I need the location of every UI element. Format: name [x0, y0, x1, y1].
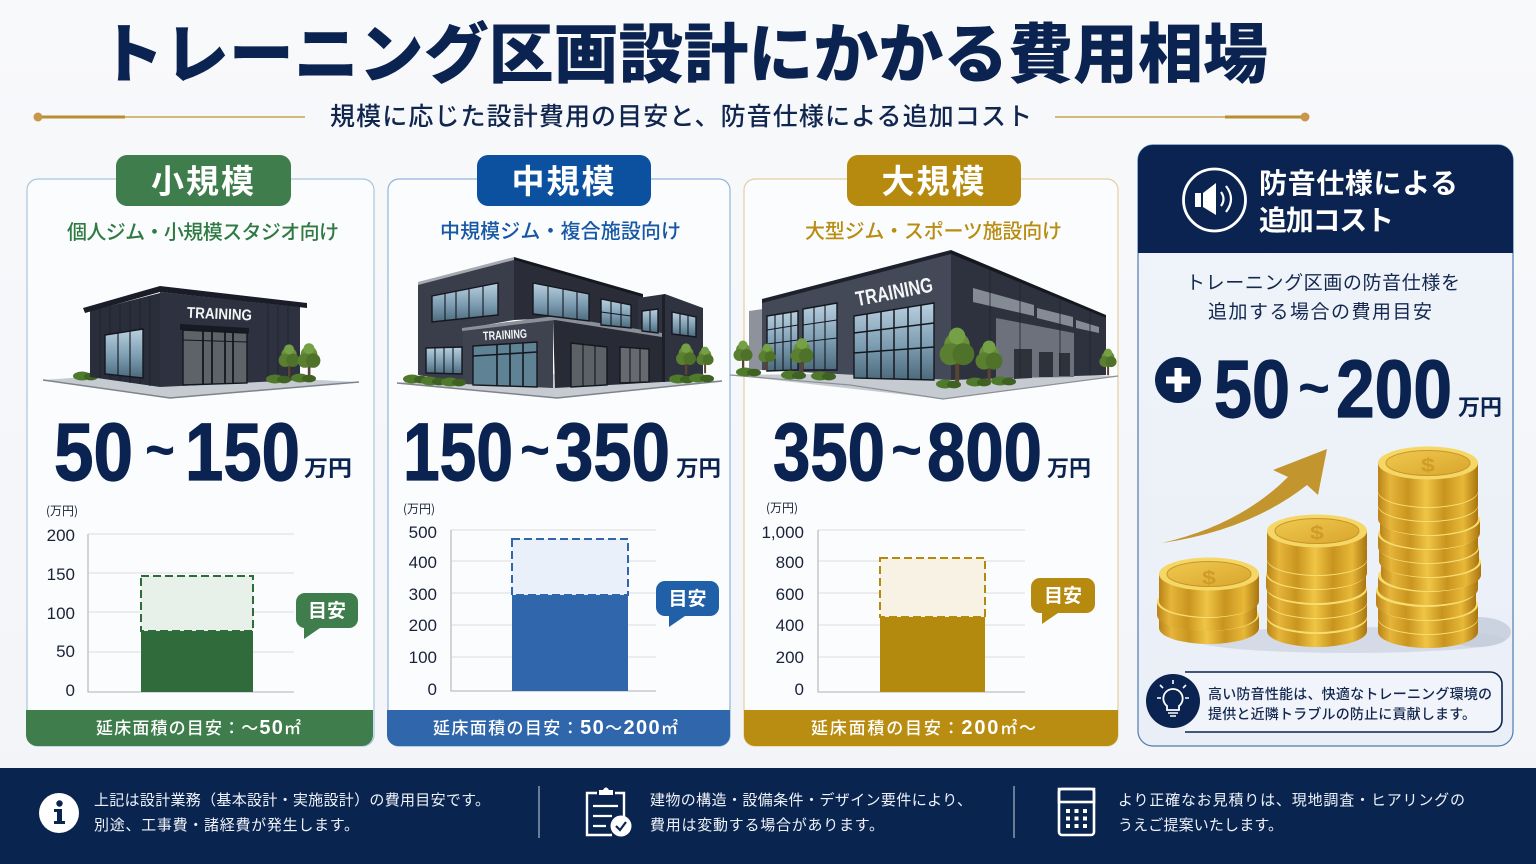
footer note 2: 建物の構造・設備条件・デザイン要件により、	[650, 789, 972, 810]
large scale bar chart: 0	[795, 680, 804, 699]
small scale badge: 小規模	[151, 155, 256, 203]
small scale price: 50	[54, 407, 133, 498]
footer note 2: 費用は変動する場合があります。	[650, 814, 884, 835]
soundproofing heading	[1259, 162, 1458, 239]
panel: soundproofing cost	[1138, 145, 1513, 746]
medium scale subheading: 中規模ジム・複合施設向け	[440, 215, 681, 244]
large building illustration: TRAINING	[854, 274, 935, 311]
small scale bar chart: 0	[66, 681, 75, 700]
medium scale badge: 中規模	[512, 155, 616, 203]
medium scale badge	[477, 155, 651, 206]
soundproofing heading: 防音仕様による	[1259, 162, 1458, 202]
large scale bar chart: 400	[776, 616, 804, 635]
soundproofing price: ~	[1298, 354, 1330, 421]
small scale price	[54, 407, 352, 498]
soundproofing price: 200	[1336, 344, 1452, 435]
soundproofing header	[1138, 145, 1513, 253]
large scale bar chart: 800	[776, 553, 804, 572]
large scale badge: 大規模	[882, 155, 986, 203]
small scale badge	[116, 155, 291, 206]
large scale subheading: 大型ジム・スポーツ施設向け	[805, 215, 1062, 244]
large scale price	[773, 407, 1091, 498]
medium scale callout: 目安	[668, 584, 707, 611]
footer note 3: うえご提案いたします。	[1118, 814, 1283, 835]
small scale callout: 目安	[308, 596, 346, 623]
soundproofing description: 追加する場合の費用目安	[1208, 297, 1432, 324]
footer note 2	[650, 789, 972, 835]
large scale price: ~	[891, 416, 922, 483]
coin stacks: $	[1202, 567, 1217, 588]
small scale bar chart: 50	[56, 642, 75, 661]
soundproofing price	[1155, 344, 1502, 435]
panel: large scale	[730, 155, 1118, 746]
medium scale bar chart: (万円)	[403, 500, 435, 517]
medium scale bar chart: 200	[409, 616, 437, 635]
medium scale bar chart	[403, 500, 656, 699]
coin stacks	[1157, 446, 1511, 653]
footer note 3: より正確なお見積りは、現地調査・ヒアリングの	[1118, 789, 1465, 810]
medium scale price: ~	[520, 416, 550, 483]
medium scale bar chart: 0	[428, 680, 437, 699]
footer note 1: 別途、工事費・諸経費が発生します。	[94, 814, 359, 835]
subtitle with gold rules: 規模に応じた設計費用の目安と、防音仕様による追加コスト	[330, 97, 1032, 133]
large building illustration	[730, 250, 1118, 399]
medium scale callout	[656, 581, 719, 627]
medium scale price: 350	[555, 407, 670, 498]
large scale area bar: 延床面積の目安：200㎡～	[811, 714, 1036, 739]
medium scale bar chart: 500	[409, 523, 437, 542]
soundproofing heading: 追加コスト	[1259, 199, 1394, 239]
callout: tip: 提供と近隣トラブルの防止に貢献します。	[1208, 704, 1476, 724]
large scale bar chart: 600	[776, 585, 804, 604]
medium scale area bar: 延床面積の目安：50～200㎡	[433, 714, 678, 739]
small scale price: ~	[145, 416, 175, 483]
soundproofing description: トレーニング区画の防音仕様を	[1186, 268, 1460, 295]
large scale callout: 目安	[1044, 581, 1082, 608]
soundproofing price: 万円	[1458, 390, 1502, 422]
medium scale area bar	[387, 710, 730, 746]
icon: info	[39, 793, 79, 833]
large scale callout	[1031, 578, 1095, 624]
icon: calculator	[1059, 789, 1094, 835]
panel: small scale	[26, 155, 374, 746]
small scale callout	[296, 593, 358, 639]
small scale bar chart: 150	[47, 565, 75, 584]
small scale area bar: 延床面積の目安：～50㎡	[96, 714, 301, 739]
large scale badge	[847, 155, 1021, 206]
title: トレーニング区画設計にかかる費用相場	[99, 2, 1268, 96]
small scale area bar	[26, 710, 373, 746]
large scale bar chart: 1,000	[761, 523, 804, 542]
large scale bar chart: 200	[776, 648, 804, 667]
coin stacks: $	[1310, 522, 1325, 543]
medium scale price: 万円	[676, 451, 721, 483]
large scale bar chart	[761, 499, 1025, 699]
small scale price: 150	[185, 407, 300, 498]
footer note 1: 上記は設計業務（基本設計・実施設計）の費用目安です。	[94, 789, 490, 810]
coin stacks: $	[1421, 454, 1436, 476]
icon: clipboard	[587, 788, 632, 836]
small scale bar chart	[46, 502, 294, 700]
small scale bar chart: 100	[47, 604, 75, 623]
small scale price: 万円	[304, 451, 352, 483]
arrow	[1162, 449, 1327, 543]
medium scale bar chart: 300	[409, 585, 437, 604]
medium building illustration	[397, 257, 722, 398]
medium scale price: 150	[403, 407, 513, 498]
medium scale bar chart: 100	[409, 648, 437, 667]
small scale subheading: 個人ジム・小規模スタジオ向け	[67, 216, 339, 245]
footer band	[0, 768, 1536, 864]
medium scale price	[403, 407, 721, 498]
large scale price: 800	[927, 407, 1042, 498]
small scale bar chart: (万円)	[46, 502, 78, 519]
callout: tip	[1146, 672, 1502, 732]
small building illustration: TRAINING	[187, 305, 252, 324]
small scale bar chart: 200	[47, 526, 75, 545]
soundproofing description	[1186, 268, 1460, 324]
small building illustration	[43, 286, 359, 398]
large scale price: 万円	[1047, 451, 1091, 483]
medium building illustration: TRAINING	[483, 327, 527, 343]
subtitle with gold rules	[34, 97, 1310, 133]
footer note 1	[94, 789, 490, 835]
large scale area bar	[744, 710, 1118, 746]
medium scale bar chart: 400	[409, 553, 437, 572]
large scale price: 350	[773, 407, 885, 498]
icon: speaker	[1184, 169, 1246, 231]
large scale bar chart: (万円)	[766, 499, 798, 516]
callout: tip: 高い防音性能は、快適なトレーニング環境の	[1208, 684, 1492, 704]
soundproofing price: 50	[1214, 344, 1290, 435]
panel: medium scale	[387, 155, 730, 746]
icon: light bulb	[1146, 674, 1200, 728]
footer note 3	[1118, 789, 1465, 835]
